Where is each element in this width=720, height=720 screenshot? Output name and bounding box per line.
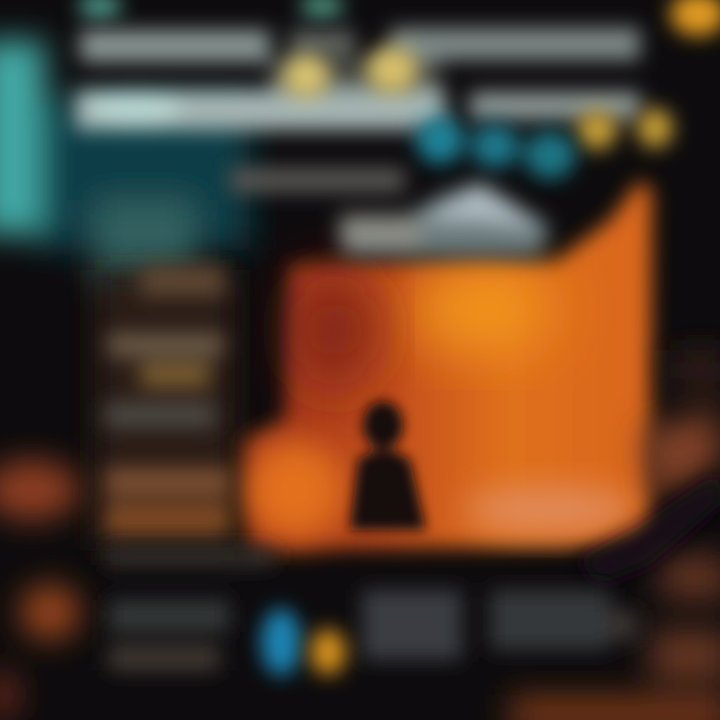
panel: left orange glows — [0, 460, 80, 720]
text block: left column bars — [105, 266, 230, 535]
shade: dark red left area — [295, 270, 375, 390]
highlight: lower left orange — [245, 440, 345, 540]
panel: right brown streaks — [510, 350, 720, 720]
icon: blue tile — [261, 608, 301, 676]
panel: orange chart — [245, 180, 652, 550]
highlight: central glow — [410, 270, 550, 350]
panel: left column dark brown backdrop — [95, 270, 235, 550]
icon: yellow glows — [282, 46, 673, 150]
icon: top-right orange glow — [670, 0, 720, 36]
panel: top teal marks — [78, 0, 344, 18]
icon: teal row — [416, 116, 576, 179]
panel: bottom row grey blocks — [105, 548, 638, 671]
highlight: lower pale glow — [465, 486, 635, 534]
icon: amber tile — [310, 629, 346, 675]
shape: dark diagonal band — [575, 470, 720, 585]
heading: blurred title lines — [75, 28, 640, 130]
panel: mountain shape above chart — [230, 168, 550, 255]
icon: silhouette figure — [350, 401, 426, 530]
panel: left teal glow — [0, 40, 250, 285]
